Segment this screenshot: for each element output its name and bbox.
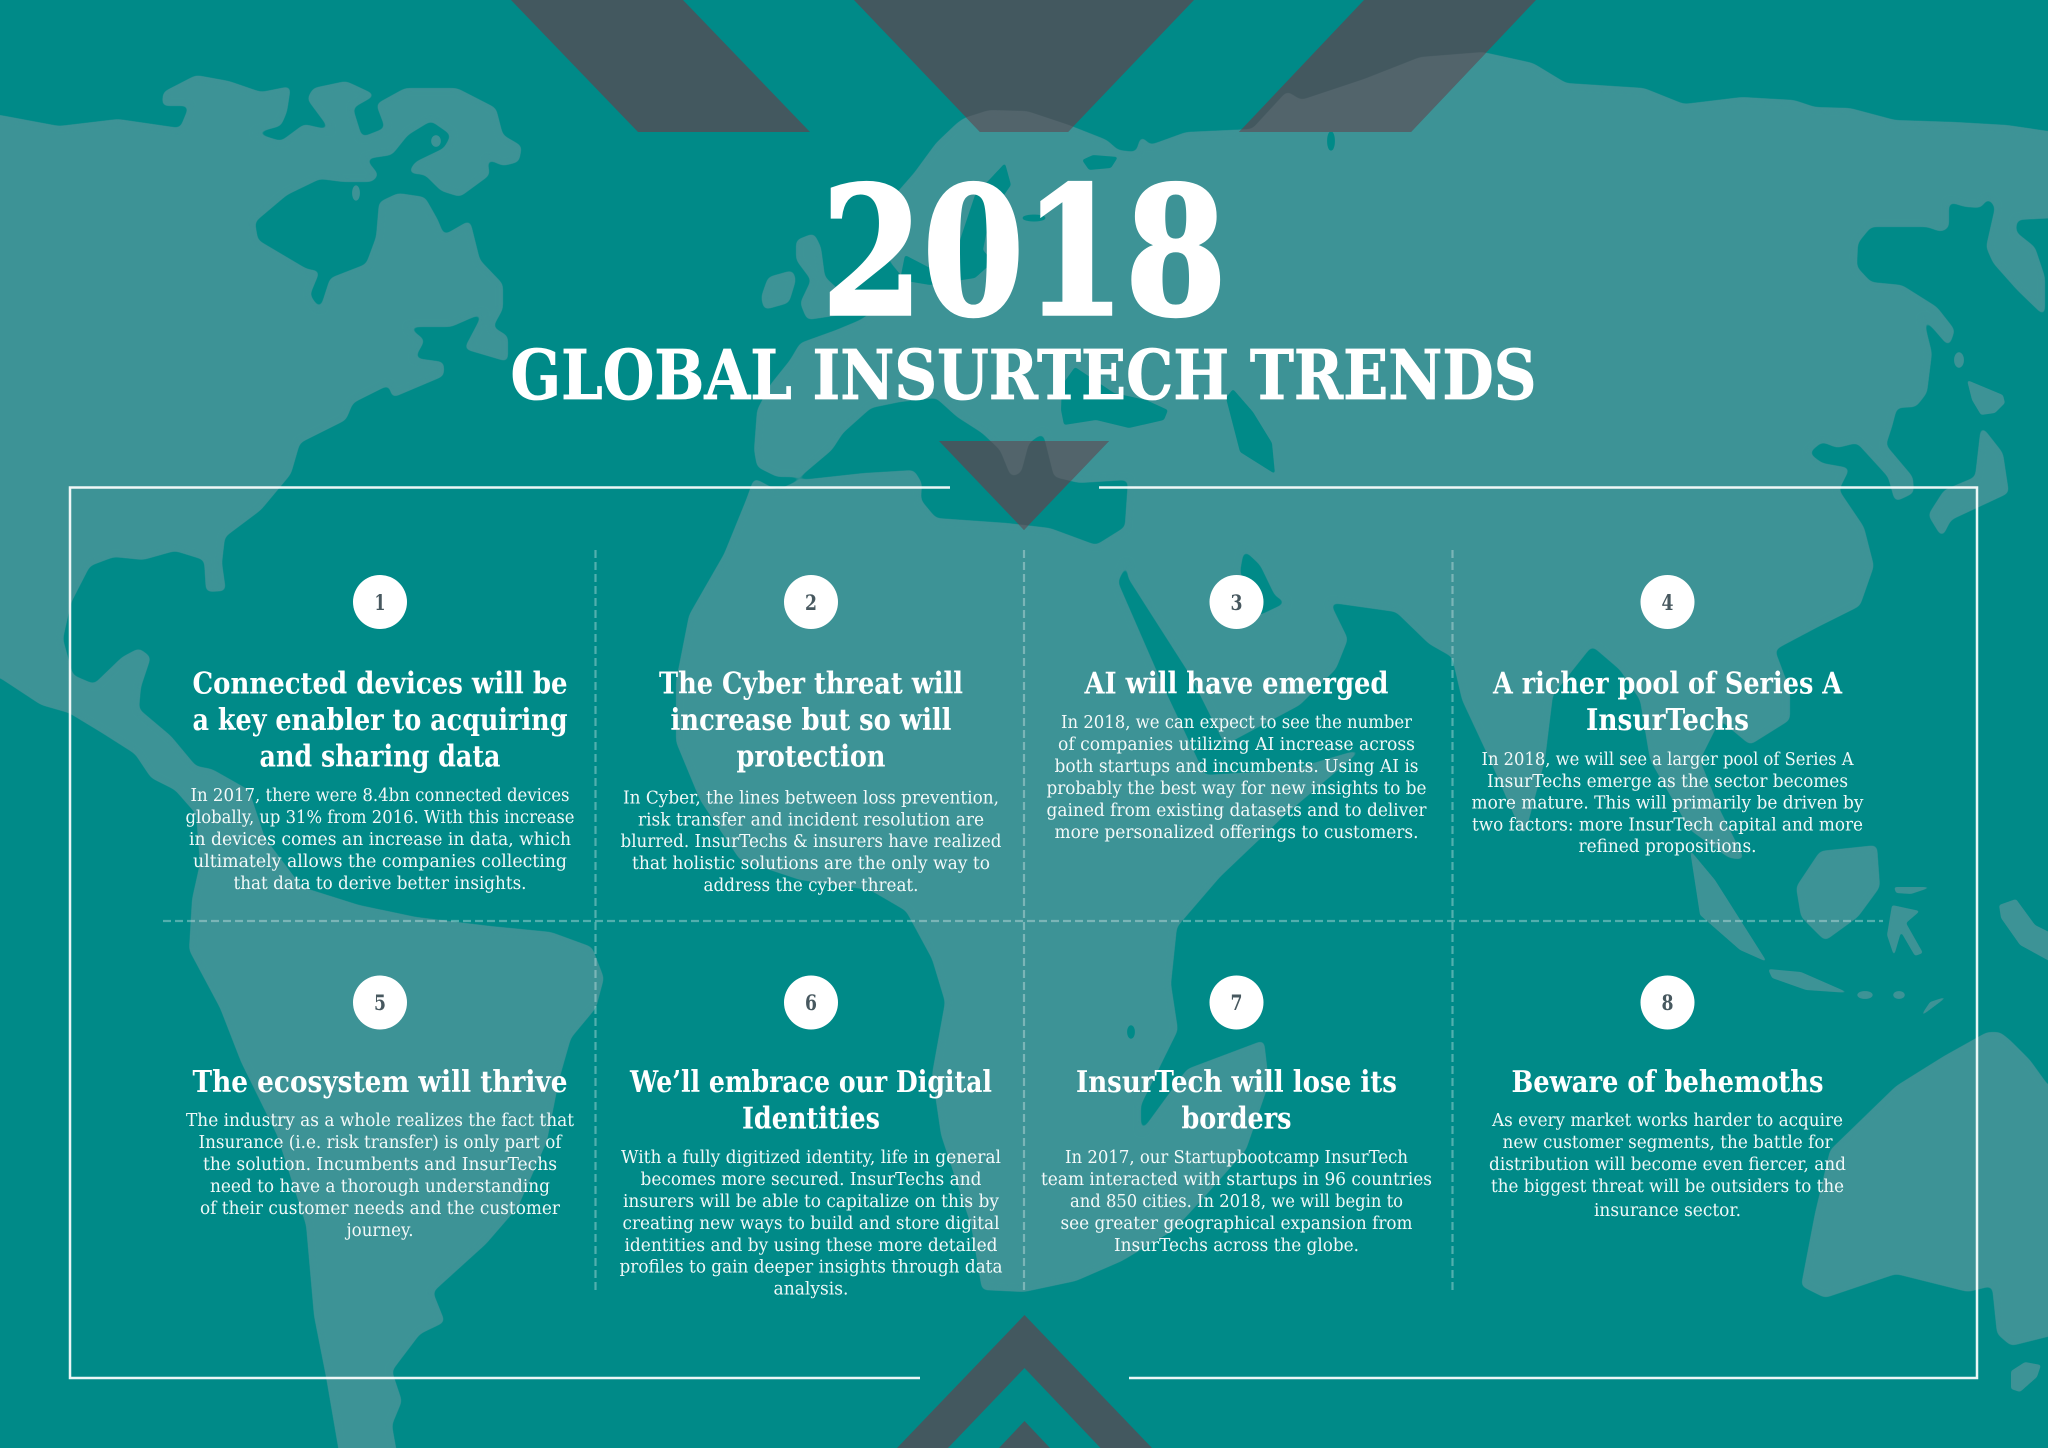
- panel 5: ecosystem: [186, 976, 574, 1241]
- body 4: more mature. This will primarily be driven by: [1472, 794, 1864, 814]
- body 2: blurred. InsurTechs & insurers have realized: [620, 832, 1002, 852]
- body 2: In Cyber, the lines between loss prevention,: [623, 789, 999, 809]
- body 7: team interacted with startups in 96 countries: [1041, 1170, 1432, 1190]
- heading 8: Beware of behemoths: [1512, 1065, 1824, 1100]
- body 8: new customer segments, the battle for: [1502, 1133, 1833, 1153]
- number badge 3: 3: [1230, 590, 1242, 615]
- number badge 4: [1640, 575, 1694, 629]
- heading 7: InsurTech will lose its: [1076, 1065, 1397, 1100]
- body 5: of their customer needs and the customer: [200, 1199, 561, 1219]
- frame arrow triangle: [939, 441, 1109, 530]
- number badge 6: [784, 976, 838, 1030]
- number badge 7: 7: [1230, 990, 1242, 1015]
- body 8: insurance sector.: [1594, 1201, 1741, 1221]
- body 7: In 2017, our Startupbootcamp InsurTech: [1065, 1148, 1408, 1168]
- body 4: two factors: more InsurTech capital and more: [1472, 816, 1863, 836]
- body 4: [1472, 750, 1864, 857]
- body 2: that holistic solutions are the only way to: [632, 854, 990, 874]
- top right chevron band: [1239, 0, 1536, 132]
- title: 2018: 2018: [822, 148, 1226, 356]
- panel 8: behemoths: [1489, 976, 1846, 1221]
- bottom chevrons: [897, 1315, 1152, 1448]
- body 4: refined propositions.: [1578, 837, 1756, 857]
- number badge 1: [353, 575, 407, 629]
- body 4: In 2018, we will see a larger pool of Series A: [1482, 750, 1854, 770]
- body 8: distribution will become even fiercer, and: [1489, 1155, 1846, 1175]
- panel 3: AI: [1046, 575, 1427, 843]
- number badge 6: 6: [805, 990, 817, 1015]
- heading 5: The ecosystem will thrive: [192, 1065, 568, 1100]
- heading 2: increase but so will: [670, 703, 952, 738]
- top centre chevron wedge: [854, 0, 1194, 132]
- body 5: need to have a thorough understanding: [210, 1177, 550, 1197]
- heading 6: We’ll embrace our Digital: [629, 1065, 992, 1100]
- panel 1: connected devices: [186, 575, 574, 894]
- body 5: [186, 1111, 574, 1241]
- body 6: With a fully digitized identity, life in general: [621, 1148, 1001, 1168]
- heading 6: Identities: [742, 1101, 880, 1136]
- number badge 2: [784, 575, 838, 629]
- body 6: becomes more secured. InsurTechs and: [640, 1170, 982, 1190]
- heading 6: [629, 1065, 992, 1136]
- body 3: In 2018, we can expect to see the number: [1061, 713, 1413, 733]
- body 6: creating new ways to build and store digital: [622, 1214, 1000, 1234]
- heading 2: [659, 666, 963, 775]
- body 3: both startups and incumbents. Using AI is: [1054, 757, 1419, 777]
- number badge 1: 1: [374, 590, 386, 615]
- body 6: analysis.: [774, 1279, 848, 1299]
- heading 1: a key enabler to acquiring: [192, 703, 568, 738]
- heading 4: A richer pool of Series A: [1492, 666, 1843, 701]
- heading 1: [192, 666, 568, 775]
- body 3: more personalized offerings to customers.: [1054, 823, 1418, 843]
- body 3: gained from existing datasets and to deliver: [1046, 801, 1427, 821]
- body 1: in devices comes an increase in data, which: [189, 830, 571, 850]
- panel 2: cyber threat: [620, 575, 1002, 896]
- number badge 2: 2: [805, 590, 817, 615]
- heading 2: protection: [736, 740, 886, 775]
- body 6: [620, 1148, 1002, 1299]
- body 3: [1046, 713, 1427, 843]
- body 5: The industry as a whole realizes the fact that: [186, 1111, 574, 1131]
- number badge 3: [1210, 575, 1264, 629]
- body 2: [620, 789, 1002, 896]
- body 3: probably the best way for new insights to be: [1046, 779, 1426, 799]
- body 7: InsurTechs across the globe.: [1114, 1236, 1359, 1256]
- number badge 8: [1640, 976, 1694, 1030]
- panel 4: series A: [1472, 575, 1864, 857]
- body 4: InsurTechs emerge as the sector becomes: [1487, 772, 1848, 792]
- panel 7: borders: [1041, 976, 1432, 1256]
- body 2: address the cyber threat.: [704, 876, 918, 896]
- number badge 4: 4: [1662, 590, 1674, 615]
- number badge 7: [1210, 976, 1264, 1030]
- number badge 5: 5: [374, 990, 386, 1015]
- heading 2: The Cyber threat will: [659, 666, 963, 701]
- body 8: As every market works harder to acquire: [1491, 1111, 1843, 1131]
- body 1: globally, up 31% from 2016. With this increase: [186, 808, 574, 828]
- subtitle: GLOBAL INSURTECH TRENDS: [510, 336, 1536, 416]
- body 2: risk transfer and incident resolution are: [638, 811, 984, 831]
- body 6: profiles to gain deeper insights through data: [620, 1258, 1002, 1278]
- number badge 5: [353, 976, 407, 1030]
- heading 3: AI will have emerged: [1084, 666, 1389, 701]
- body 6: insurers will be able to capitalize on this by: [623, 1192, 999, 1212]
- body 3: of companies utilizing AI increase across: [1058, 735, 1415, 755]
- body 1: In 2017, there were 8.4bn connected devices: [190, 786, 570, 806]
- body 7: [1041, 1148, 1432, 1256]
- heading 7: [1076, 1065, 1397, 1136]
- heading 7: borders: [1182, 1101, 1292, 1136]
- body 7: see greater geographical expansion from: [1060, 1214, 1413, 1234]
- number badge 8: 8: [1662, 990, 1674, 1015]
- body 5: journey.: [345, 1221, 414, 1241]
- body 7: and 850 cities. In 2018, we will begin to: [1070, 1192, 1403, 1212]
- body 1: that data to derive better insights.: [234, 874, 526, 894]
- body 1: ultimately allows the companies collecting: [193, 852, 567, 872]
- panel 6: digital identities: [620, 976, 1002, 1299]
- body 8: the biggest threat will be outsiders to the: [1491, 1177, 1844, 1197]
- body 5: the solution. Incumbents and InsurTechs: [203, 1155, 557, 1175]
- heading 4: InsurTechs: [1586, 703, 1749, 738]
- content frame: [70, 488, 1977, 1378]
- body 8: [1489, 1111, 1846, 1221]
- body 6: identities and by using these more detailed: [624, 1236, 998, 1256]
- body 1: [186, 786, 574, 894]
- top left chevron band: [511, 0, 810, 132]
- heading 4: [1492, 666, 1843, 738]
- heading 1: Connected devices will be: [192, 666, 568, 701]
- heading 1: and sharing data: [260, 740, 500, 775]
- body 5: Insurance (i.e. risk transfer) is only part of: [198, 1133, 563, 1153]
